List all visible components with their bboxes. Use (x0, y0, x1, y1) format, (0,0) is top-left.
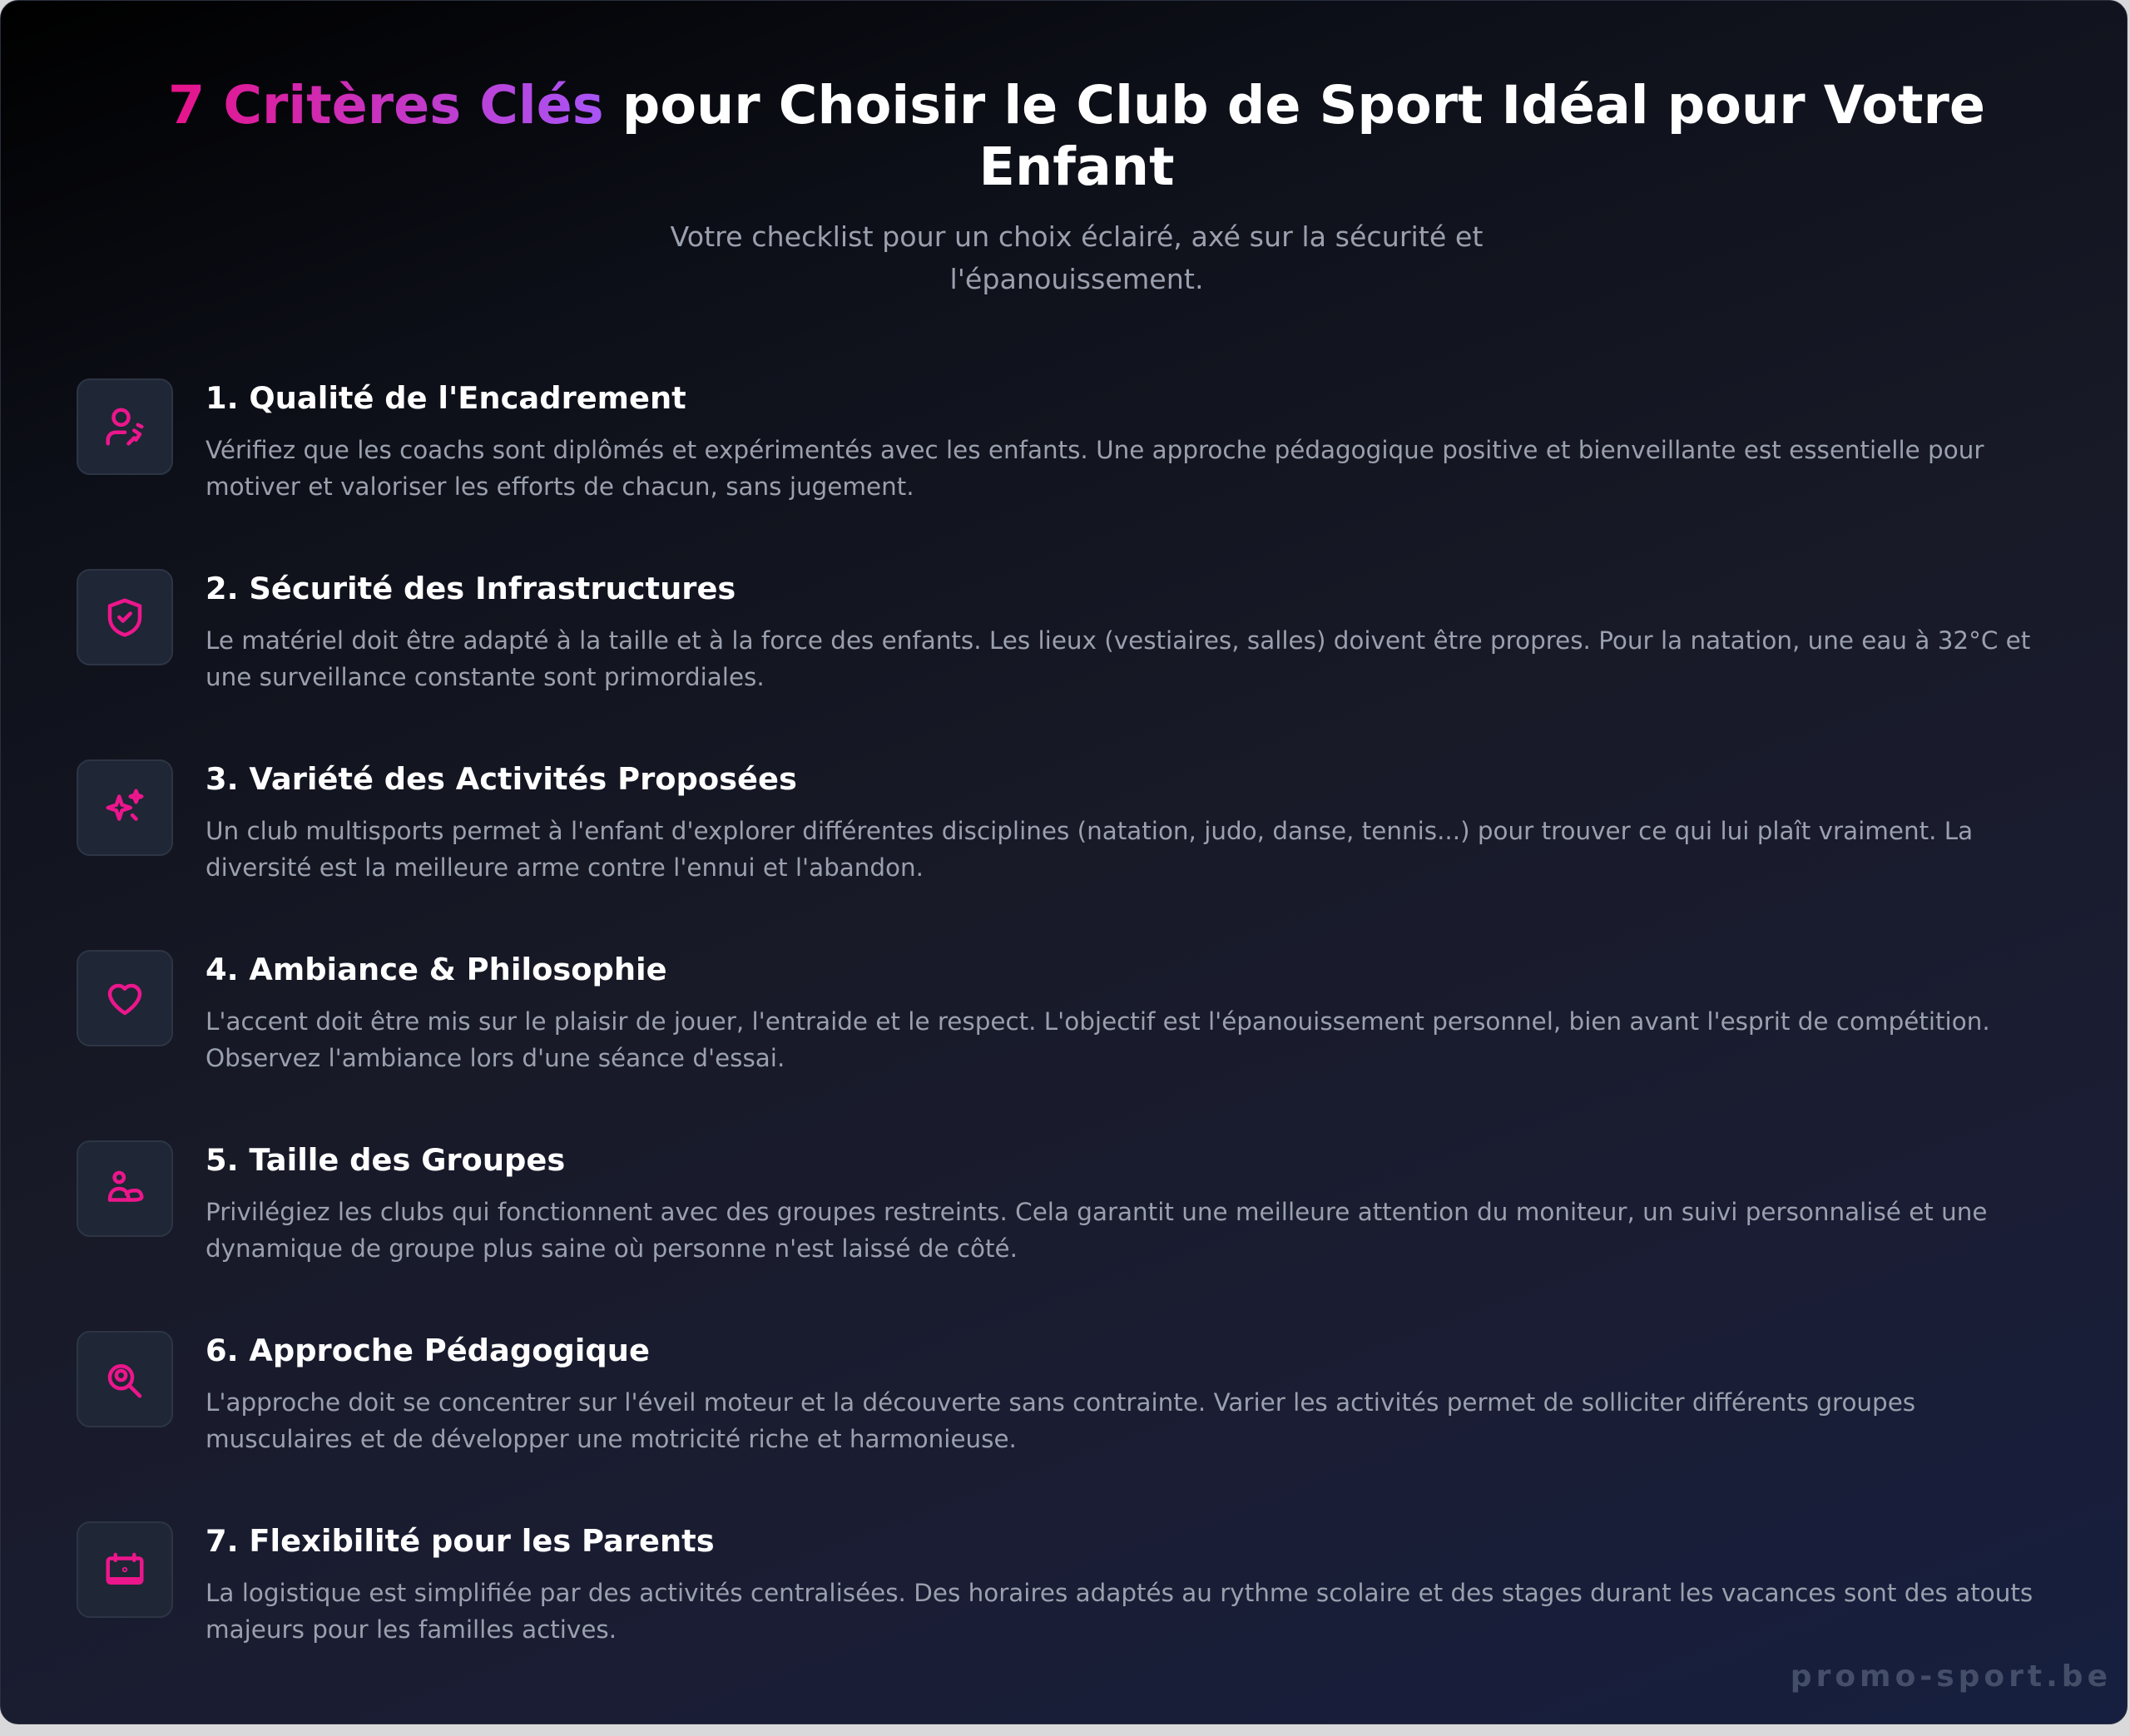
text 3: Un club multisports permet à l'enfant d'explorer différentes disciplines (natation, judo, danse, tennis...) pour trouver ce qui lui plaît vraiment. La diversité est la meilleure arme contre l'ennui et l'abandon. (206, 817, 1973, 882)
heading 4: 4. Ambiance & Philosophie (206, 952, 667, 987)
text 7: La logistique est simplifiée par des activités centralisées. Des horaires adaptés au rythme scolaire et des stages durant les vacances sont des atouts majeurs pour les familles actives. (206, 1579, 2033, 1644)
item 6 (77, 1331, 1915, 1453)
text 5: Privilégiez les clubs qui fonctionnent avec des groupes restreints. Cela garantit une meilleure attention du moniteur, un suivi personnalisé et une dynamique de groupe plus saine où personne n'est laissé de côté. (206, 1198, 1987, 1263)
watermark: promo-sport.be (1791, 1659, 2112, 1694)
heading 5: 5. Taille des Groupes (206, 1142, 565, 1178)
text 1: Vérifiez que les coachs sont diplômés et expérimentés avec les enfants. Une approche pédagogique positive et bienveillante est essentielle pour motiver et valoriser les efforts de chacun, sans jugement. (206, 436, 1984, 501)
item 2 (77, 569, 2030, 691)
text 2: Le matériel doit être adapté à la taille et à la force des enfants. Les lieux (vestiaires, salles) doivent être propres. Pour la natation, une eau à 32°C et une surveillance constante sont primordiales. (206, 626, 2030, 691)
heading 3: 3. Variété des Activités Proposées (206, 761, 797, 797)
item 7 (77, 1521, 2033, 1644)
subtitle: Votre checklist pour un choix éclairé, axé sur la sécurité et l'épanouissement. (671, 220, 1483, 295)
text 4: L'accent doit être mis sur le plaisir de jouer, l'entraide et le respect. L'objectif est l'épanouissement personnel, bien avant l'esprit de compétition. Observez l'ambiance lors d'une séance d'essai. (206, 1007, 1990, 1072)
title: 7 Critères Clés pour Choisir le Club de Sport Idéal pour Votre Enfant (168, 74, 1985, 197)
icon: user cog (77, 378, 173, 475)
icon: group (77, 1140, 173, 1237)
icon: calendar (77, 1521, 173, 1618)
heading 2: 2. Sécurité des Infrastructures (206, 571, 736, 606)
item 1 (77, 378, 1984, 501)
item 5 (77, 1140, 1987, 1263)
icon: sparkles (77, 759, 173, 856)
heading 6: 6. Approche Pédagogique (206, 1333, 650, 1368)
text 6: L'approche doit se concentrer sur l'éveil moteur et la découverte sans contrainte. Varier les activités permet de solliciter différents groupes musculaires et de développer une motricité riche et harmonieuse. (206, 1388, 1915, 1453)
icon: shield check (77, 569, 173, 665)
heading 7: 7. Flexibilité pour les Parents (206, 1523, 715, 1559)
heading 1: 1. Qualité de l'Encadrement (206, 380, 686, 416)
item 4 (77, 950, 1990, 1072)
icon: heart (77, 950, 173, 1046)
icon: search (77, 1331, 173, 1427)
item 3 (77, 759, 1973, 882)
